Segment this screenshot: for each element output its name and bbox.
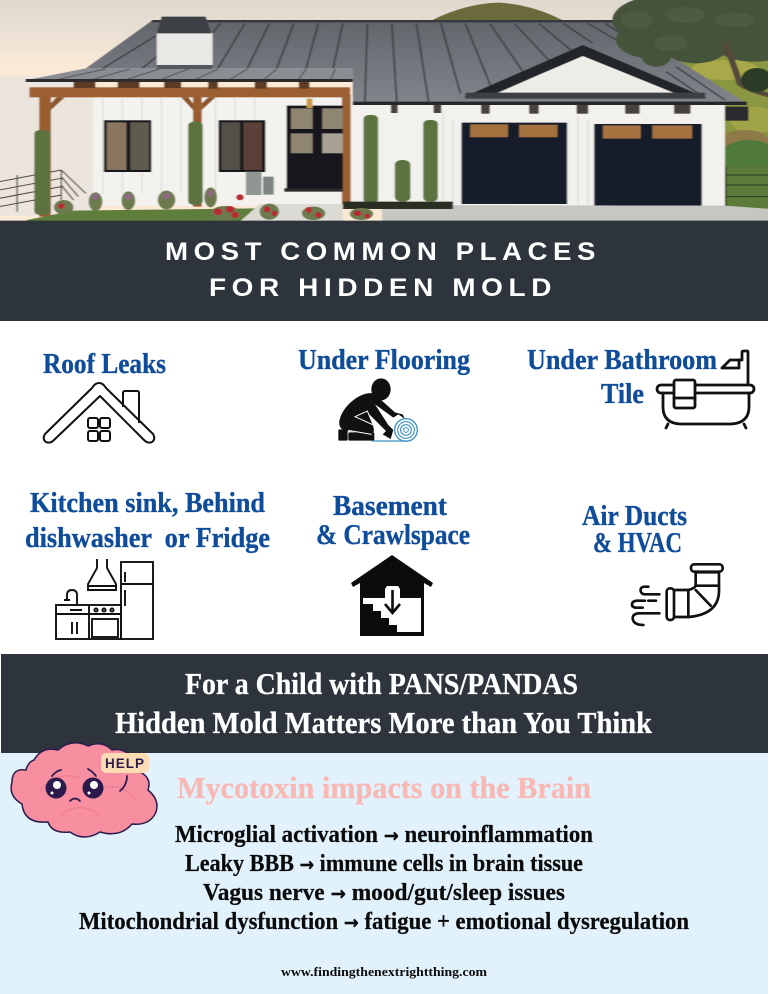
text block: brain impacts: Vagus nerve → mood/gut/sleep issues bbox=[203, 880, 565, 906]
icon: kitchen appliances bbox=[56, 559, 153, 639]
label: help tag bbox=[101, 753, 149, 773]
panel: roof leaks bbox=[43, 349, 166, 443]
icon: house with basement stairs bbox=[351, 555, 433, 636]
heading: basement: Basement bbox=[333, 491, 448, 522]
panel: kitchen bbox=[25, 488, 270, 639]
icon: house roof bbox=[44, 383, 154, 443]
photo: white farmhouse with metal roof bbox=[0, 0, 768, 227]
heading: roof leaks: Roof Leaks bbox=[43, 349, 166, 380]
text block: brain impacts: Microglial activation → neuroinflammation bbox=[175, 822, 593, 848]
heading: air ducts: Air Ducts bbox=[582, 501, 687, 532]
banner: pans/pandas bbox=[1, 654, 768, 754]
title: most common places: MOST COMMON PLACES bbox=[165, 238, 601, 266]
text block: brain impacts bbox=[79, 822, 689, 935]
text block: brain impacts: Mitochondrial dysfunction → fatigue + emotional dysregulation bbox=[79, 909, 689, 935]
banner: main title bbox=[0, 221, 768, 321]
heading: dishwasher or fridge: dishwasher or Fridge bbox=[25, 523, 270, 554]
heading: tile: Tile bbox=[601, 379, 644, 410]
panel: under bathroom tile bbox=[527, 345, 754, 428]
icon: bathtub with shower bbox=[657, 351, 754, 428]
panel: air ducts and hvac bbox=[582, 501, 723, 625]
heading: under bathroom: Under Bathroom bbox=[527, 345, 717, 376]
heading: kitchen sink, behind: Kitchen sink, Behind bbox=[30, 488, 265, 519]
panel: mycotoxin impacts bbox=[0, 743, 768, 994]
heading: hidden mold matters: Hidden Mold Matters More than You Think bbox=[115, 705, 653, 740]
icon: duct pipe with airflow bbox=[632, 564, 723, 625]
heading: hvac: & HVAC bbox=[593, 528, 682, 559]
icon: person rolling carpet bbox=[338, 378, 417, 441]
heading: under flooring: Under Flooring bbox=[298, 345, 470, 376]
title: for hidden mold: FOR HIDDEN MOLD bbox=[209, 274, 557, 302]
panel: basement and crawlspace bbox=[316, 491, 470, 636]
heading: for a child: For a Child with PANS/PANDAS bbox=[185, 666, 578, 701]
heading: crawlspace: & Crawlspace bbox=[316, 520, 470, 551]
text block: brain impacts: Leaky BBB → immune cells in brain tissue bbox=[185, 851, 583, 877]
label: help tag: HELP bbox=[105, 756, 145, 771]
heading: mycotoxin impacts on the brain: Mycotoxin impacts on the Brain bbox=[177, 770, 591, 805]
panel: under flooring bbox=[298, 345, 470, 441]
icon: worried brain mascot bbox=[11, 743, 157, 837]
footer: website url: www.findingthenextrightthing.com bbox=[281, 964, 487, 979]
